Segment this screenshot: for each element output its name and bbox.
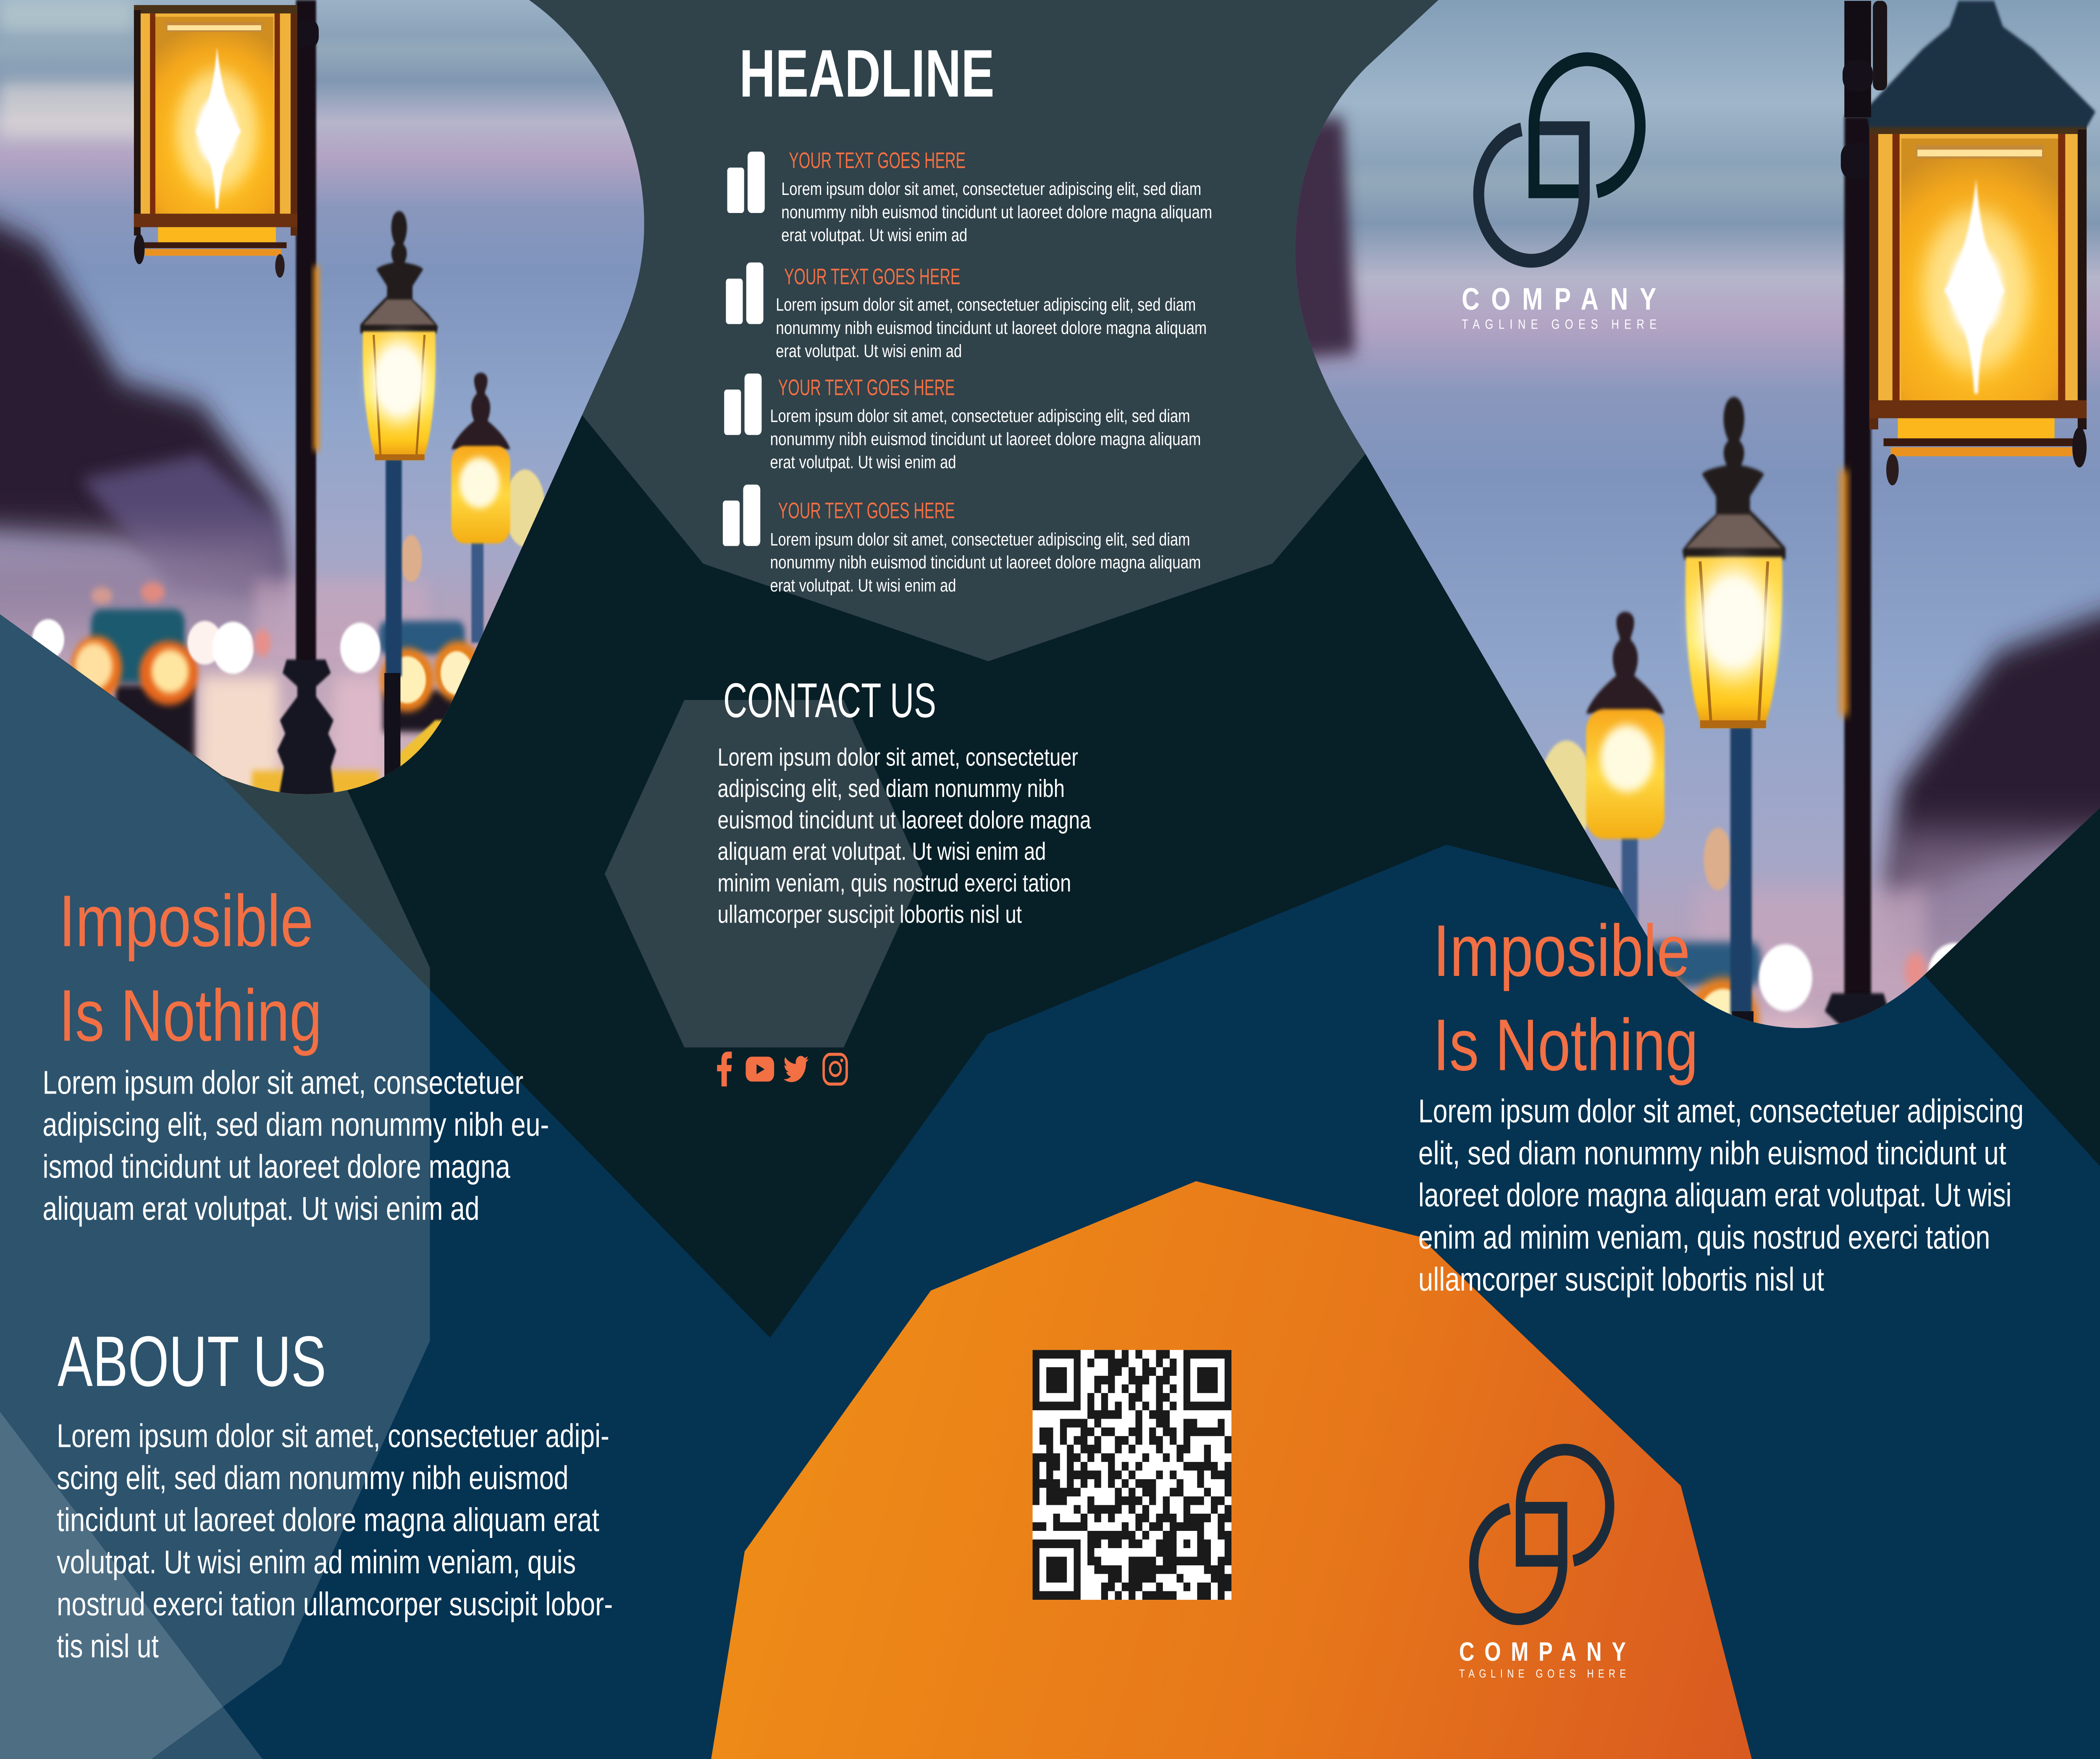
title: left imposible is nothing	[59, 882, 322, 1057]
body text: erat volutpat. Ut wisi enim ad	[770, 576, 956, 597]
body text: Lorem ipsum dolor sit amet, consectetuer adipiscing elit, sed diam	[776, 296, 1196, 316]
subheading: YOUR TEXT GOES HERE	[778, 498, 955, 523]
right body text: Lorem ipsum dolor sit amet, consectetuer adipiscing	[1418, 1094, 2024, 1131]
list item 2	[726, 263, 1207, 362]
about body text: tincidunt ut laoreet dolore magna aliquam erat	[57, 1503, 600, 1540]
social icons	[717, 1052, 847, 1086]
list item 3	[724, 373, 1201, 473]
body text: nonummy nibh euismod tincidunt ut laoreet dolore magna aliquam	[776, 319, 1207, 339]
contact body text: euismod tincidunt ut laoreet dolore magna	[718, 808, 1092, 835]
contact body text: minim veniam, quis nostrud exerci tation	[718, 871, 1071, 898]
right body text: laoreet dolore magna aliquam erat volutpat. Ut wisi	[1418, 1178, 2012, 1215]
panel: navy base shape	[0, 614, 2100, 1759]
left body text: Lorem ipsum dolor sit amet, consectetuer	[42, 1065, 524, 1102]
contact body text: aliquam erat volutpat. Ut wisi enim ad	[718, 840, 1046, 867]
panel: top centre slate shape	[509, 0, 1460, 661]
heading: about us: ABOUT US	[58, 1324, 326, 1403]
body text: Lorem ipsum dolor sit amet, consectetuer adipiscing elit, sed diam	[781, 180, 1202, 200]
body text: erat volutpat. Ut wisi enim ad	[781, 226, 967, 246]
title: right imposible is nothing: Is Nothing	[1433, 1006, 1698, 1087]
about body text: scing elit, sed diam nonummy nibh euismod	[57, 1460, 569, 1498]
icon: instagram	[824, 1054, 847, 1084]
icon: bars	[727, 152, 765, 213]
logo text: tagline: TAGLINE GOES HERE	[1462, 317, 1657, 332]
right body text: elit, sed diam nonummy nibh euismod tincidunt ut	[1418, 1136, 2007, 1173]
about body text: nostrud exerci tation ullamcorper suscipit lobor-	[57, 1587, 613, 1624]
title: right imposible is nothing	[1433, 912, 1698, 1087]
title: right imposible is nothing: Imposible	[1433, 912, 1690, 993]
about body text: volutpat. Ut wisi enim ad minim veniam, quis	[57, 1545, 576, 1582]
logo text: company: COMPANY	[1462, 281, 1657, 316]
body text: nonummy nibh euismod tincidunt ut laoreet dolore magna aliquam	[781, 203, 1212, 223]
contact body text: Lorem ipsum dolor sit amet, consectetuer	[718, 745, 1078, 772]
body text: nonummy nibh euismod tincidunt ut laoreet dolore magna aliquam	[770, 430, 1201, 450]
body text: erat volutpat. Ut wisi enim ad	[770, 453, 956, 473]
panel: orange back cover shape	[711, 1181, 1752, 1759]
logo text: bottom tagline: TAGLINE GOES HERE	[1459, 1669, 1626, 1681]
contact body text: adipiscing elit, sed diam nonummy nibh	[718, 777, 1065, 804]
body text: erat volutpat. Ut wisi enim ad	[776, 342, 962, 362]
list item 4	[723, 484, 1201, 597]
panel: translucent left overlay	[0, 505, 430, 1759]
left body text: aliquam erat volutpat. Ut wisi enim ad	[42, 1191, 480, 1228]
subheading: YOUR TEXT GOES HERE	[789, 148, 966, 173]
headline: HEADLINE	[739, 38, 995, 112]
title: left imposible is nothing: Is Nothing	[59, 977, 322, 1057]
logo: bottom company mark	[1474, 1450, 1610, 1620]
icon: bars	[726, 263, 764, 324]
icon: facebook	[717, 1052, 732, 1086]
contact body text: ullamcorper suscipit lobortis nisl ut	[718, 902, 1022, 929]
panel: translucent contact hexagon	[605, 700, 923, 1047]
right body text: enim ad minim veniam, quis nostrud exerci tation	[1418, 1220, 1990, 1257]
title: left imposible is nothing: Imposible	[59, 882, 313, 963]
subheading: YOUR TEXT GOES HERE	[784, 264, 961, 289]
about body text: Lorem ipsum dolor sit amet, consectetuer adipi-	[57, 1418, 609, 1455]
photo: right street lamps	[1265, 0, 2100, 1177]
body text: Lorem ipsum dolor sit amet, consectetuer adipiscing elit, sed diam	[770, 407, 1190, 427]
subheading: YOUR TEXT GOES HERE	[778, 375, 955, 400]
body text: nonummy nibh euismod tincidunt ut laoreet dolore magna aliquam	[770, 553, 1201, 573]
logo text: bottom company: COMPANY	[1459, 1639, 1627, 1667]
icon: youtube	[746, 1057, 774, 1082]
panel: translucent lower-left triangle	[0, 1412, 262, 1759]
left body text: ismod tincidunt ut laoreet dolore magna	[42, 1149, 510, 1186]
icon: bars	[724, 373, 761, 435]
qr code	[1033, 1350, 1231, 1600]
photo: left street lamps	[0, 0, 646, 797]
icon: bars	[723, 484, 760, 546]
about body text: tis nisl ut	[57, 1629, 160, 1666]
right body text: ullamcorper suscipit lobortis nisl ut	[1418, 1262, 1825, 1299]
body text: Lorem ipsum dolor sit amet, consectetuer adipiscing elit, sed diam	[770, 530, 1190, 550]
heading: contact us: CONTACT US	[723, 675, 936, 729]
left body text: adipiscing elit, sed diam nonummy nibh eu-	[42, 1107, 549, 1144]
logo: top right company mark	[1479, 59, 1640, 261]
list item 1	[727, 148, 1212, 246]
icon: twitter	[783, 1056, 808, 1082]
